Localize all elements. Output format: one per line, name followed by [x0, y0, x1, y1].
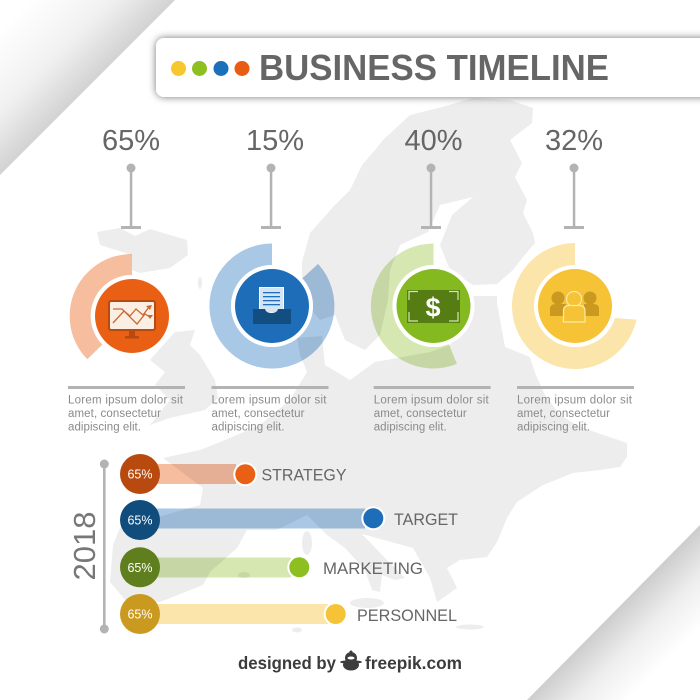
rule and description — [212, 386, 328, 434]
credit line — [238, 650, 462, 673]
pin stem — [261, 164, 281, 229]
rule and description: amet, consectetur — [517, 408, 610, 420]
column: 65% monitor — [68, 125, 185, 434]
credit line: freepik.com — [365, 653, 462, 673]
progress ring — [512, 243, 636, 369]
rule and description: adipiscing elit. — [68, 422, 141, 434]
bar: target — [120, 500, 458, 540]
bar: target: 65% — [127, 514, 153, 528]
rule and description: adipiscing elit. — [517, 422, 590, 434]
percentage 65%: 65% — [102, 125, 160, 157]
timeline axis with year — [67, 460, 109, 634]
rule and description: amet, consectetur — [212, 408, 305, 420]
icon: group of people — [534, 265, 616, 347]
rule and description: adipiscing elit. — [374, 422, 447, 434]
bar: personnel: PERSONNEL — [357, 606, 457, 625]
bar: marketing: MARKETING — [323, 559, 423, 578]
icon: dollar banknote: $ — [425, 292, 441, 322]
bar: strategy — [120, 454, 346, 494]
year label: 2018 — [67, 512, 102, 580]
rule and description: Lorem ipsum dolor sit — [68, 394, 184, 406]
icon: four coloured dots — [171, 61, 250, 76]
bar: target: TARGET — [394, 510, 458, 529]
icon: document tray — [231, 265, 313, 347]
decorative folded corner: bottom right — [527, 525, 700, 700]
bar: strategy: 65% — [127, 468, 153, 482]
pin stem — [564, 164, 584, 229]
icon: monitor with chart — [91, 275, 173, 357]
bar: marketing — [120, 547, 423, 587]
column: 15% document — [209, 125, 334, 434]
percentage 15%: 15% — [246, 125, 304, 157]
title banner — [156, 38, 700, 97]
map of Europe background — [97, 98, 627, 632]
rule and description: amet, consectetur — [374, 408, 467, 420]
rule and description — [517, 386, 634, 434]
rule and description: adipiscing elit. — [212, 422, 284, 434]
decorative folded corner: top left — [0, 0, 175, 175]
column: 32% people — [512, 125, 636, 434]
percentage 40%: 40% — [404, 125, 463, 157]
pin stem — [421, 164, 441, 229]
progress ring — [371, 243, 457, 368]
percentage 32%: 32% — [545, 125, 603, 157]
title text: BUSINESS TIMELINE — [259, 47, 609, 88]
rule and description: amet, consectetur — [68, 408, 161, 420]
rule and description: Lorem ipsum dolor sit — [517, 394, 633, 406]
progress ring — [209, 243, 334, 368]
bar: marketing: 65% — [127, 561, 153, 575]
bar: personnel: 65% — [127, 608, 153, 622]
icon: dollar banknote — [392, 265, 474, 347]
rule and description — [374, 386, 491, 434]
pin stem — [121, 164, 141, 229]
bar: personnel — [120, 594, 457, 634]
rule and description: Lorem ipsum dolor sit — [374, 394, 489, 406]
column: 40% banknote — [371, 125, 491, 434]
credit line: designed by — [238, 653, 336, 673]
progress ring — [70, 254, 132, 359]
icon: freepik logo — [340, 650, 362, 670]
rule and description — [68, 386, 185, 434]
rule and description: Lorem ipsum dolor sit — [212, 394, 327, 406]
bar: strategy: STRATEGY — [262, 466, 346, 484]
